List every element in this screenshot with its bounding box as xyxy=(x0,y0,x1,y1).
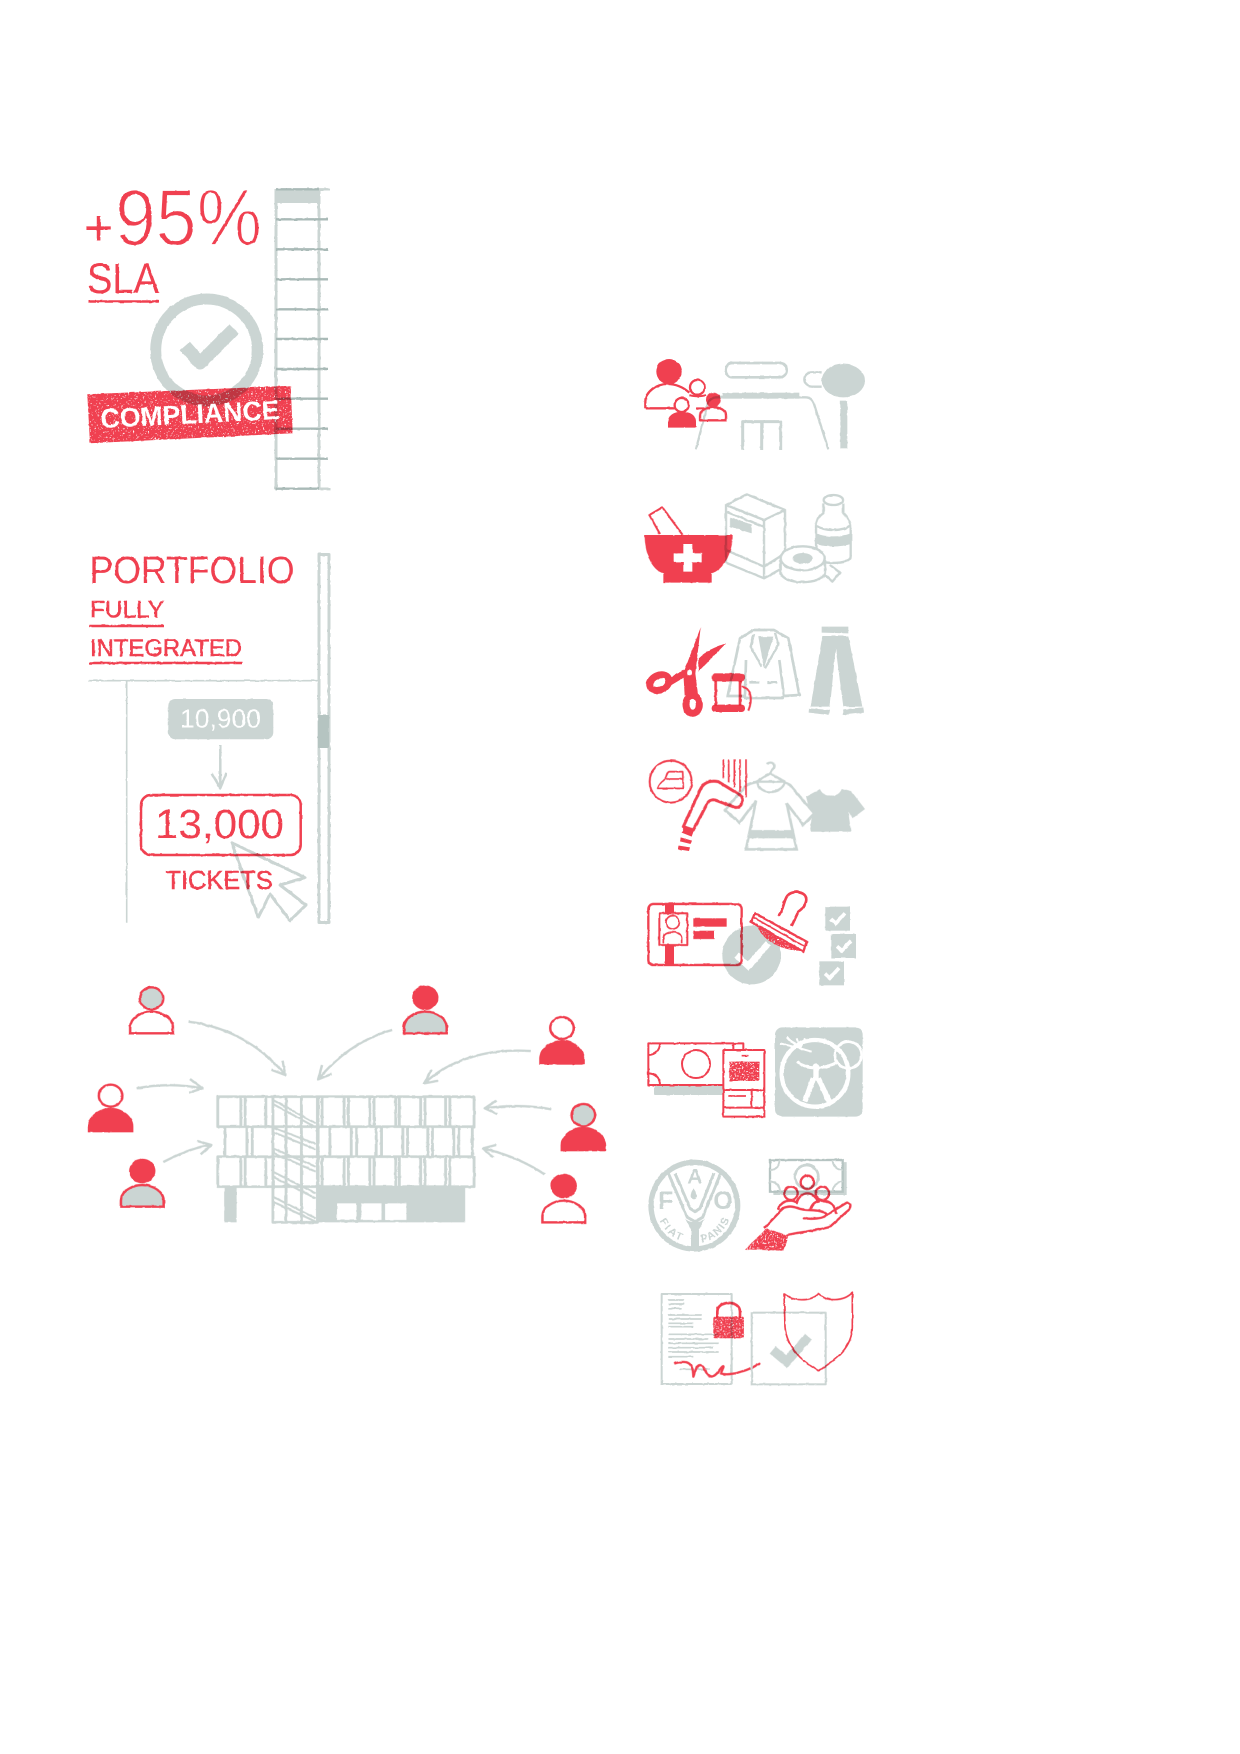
icon: building xyxy=(218,1097,474,1222)
arrow: 10,900 to 13,000 xyxy=(212,745,226,788)
banner: compliance stamp xyxy=(87,386,293,443)
icon: FAO emblem xyxy=(648,1159,740,1252)
panel: portfolio xyxy=(89,550,329,923)
icon: ID and approval xyxy=(648,892,856,985)
subheading: fully: FULLY xyxy=(90,597,164,624)
arrows: requests to building xyxy=(137,1022,551,1174)
panel: service icons row 1 and 2 xyxy=(645,359,865,583)
banner: compliance stamp: COMPLIANCE xyxy=(100,395,280,434)
icon: person bottom right xyxy=(542,1174,585,1222)
icon: FAO emblem: O xyxy=(713,1188,733,1215)
icon: signed document with lock xyxy=(662,1294,759,1384)
icon: person bottom left xyxy=(121,1159,164,1207)
icon: person middle right xyxy=(561,1104,606,1151)
icon: person middle left xyxy=(88,1085,133,1132)
icon: person top left xyxy=(130,987,173,1033)
panel: service icons row 5 and 6 xyxy=(648,892,863,1117)
icon: funding for people xyxy=(745,1160,850,1251)
heading: portfolio: PORTFOLIO xyxy=(90,550,294,592)
infographic artwork xyxy=(84,173,865,1386)
icon: check mark in circle xyxy=(156,299,258,401)
icon: global emblem xyxy=(775,1027,863,1117)
value box: 10,900 xyxy=(168,699,273,739)
icon: FAO emblem: PANIS xyxy=(700,1218,728,1242)
panel: people to headquarters building xyxy=(88,985,606,1222)
icon: FAO emblem: A xyxy=(687,1165,703,1189)
icon: ironing and laundry xyxy=(650,759,865,851)
panel: service icons row 3 and 4 xyxy=(647,627,865,851)
icon: pharmacy supplies xyxy=(645,494,851,583)
label: tickets: TICKETS xyxy=(166,865,272,895)
value box: 10,900: 10,900 xyxy=(180,703,261,733)
icon: banknote and ATM xyxy=(648,1043,764,1117)
icon: FAO emblem: FIAT xyxy=(660,1218,684,1240)
value box: 13,000 xyxy=(141,795,301,855)
progress column with ticks xyxy=(276,189,330,489)
heading: SLA: SLA xyxy=(87,255,159,303)
icon: security shield xyxy=(752,1293,852,1384)
icon: FAO emblem: F xyxy=(658,1188,673,1215)
heading: +95%: 95% xyxy=(115,173,262,262)
value box: 13,000: 13,000 xyxy=(155,801,284,847)
panel: SLA compliance xyxy=(84,173,330,489)
panel: service icons row 7 and 8 xyxy=(648,1158,854,1386)
icon: tailoring xyxy=(647,627,864,715)
icon: person top centre xyxy=(404,985,447,1033)
subheading: integrated: INTEGRATED xyxy=(90,635,242,662)
icon: mouse cursor xyxy=(232,843,306,921)
icon: person top right xyxy=(539,1017,585,1065)
heading: +95%: + xyxy=(84,200,113,256)
portfolio side gauge xyxy=(318,554,329,922)
icon: conference xyxy=(645,359,865,450)
